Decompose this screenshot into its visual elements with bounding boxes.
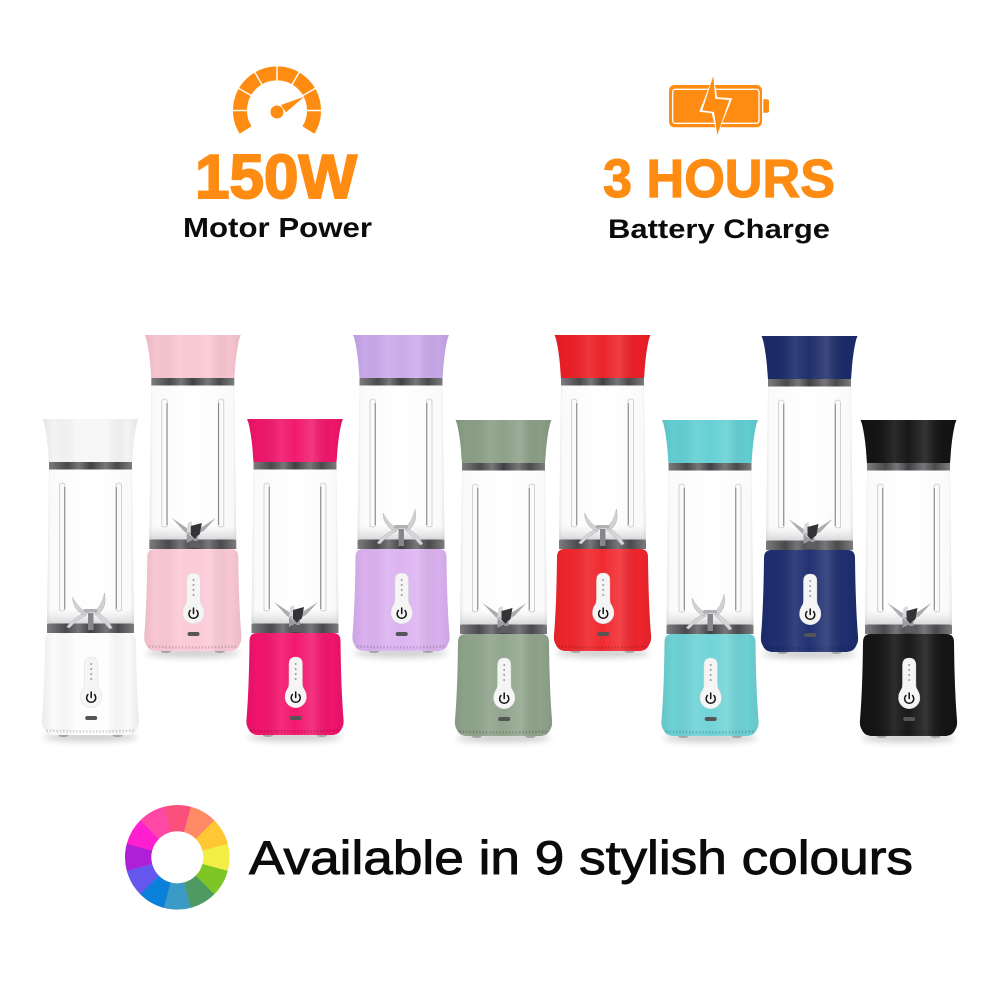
heading: 3 HOURS: 3 HOURS	[603, 149, 835, 209]
icon: colour wheel	[122, 802, 233, 913]
blender: white	[42, 419, 139, 742]
blender: pink	[144, 335, 241, 658]
blender: navy	[761, 336, 858, 658]
heading: 150W: 150W	[195, 143, 357, 212]
label: Motor Power: Motor Power	[183, 212, 372, 243]
icon: speedometer	[231, 64, 323, 130]
caption: available colours: Available in 9 stylish colours	[249, 831, 913, 884]
blender: lilac	[352, 335, 450, 658]
blender: sage green	[455, 420, 552, 742]
blender: teal	[661, 420, 759, 742]
blender: red	[554, 335, 651, 658]
icon: battery charging	[669, 76, 769, 135]
label: Battery Charge: Battery Charge	[608, 214, 830, 244]
blender: black	[860, 420, 957, 742]
blender: magenta	[246, 419, 344, 742]
